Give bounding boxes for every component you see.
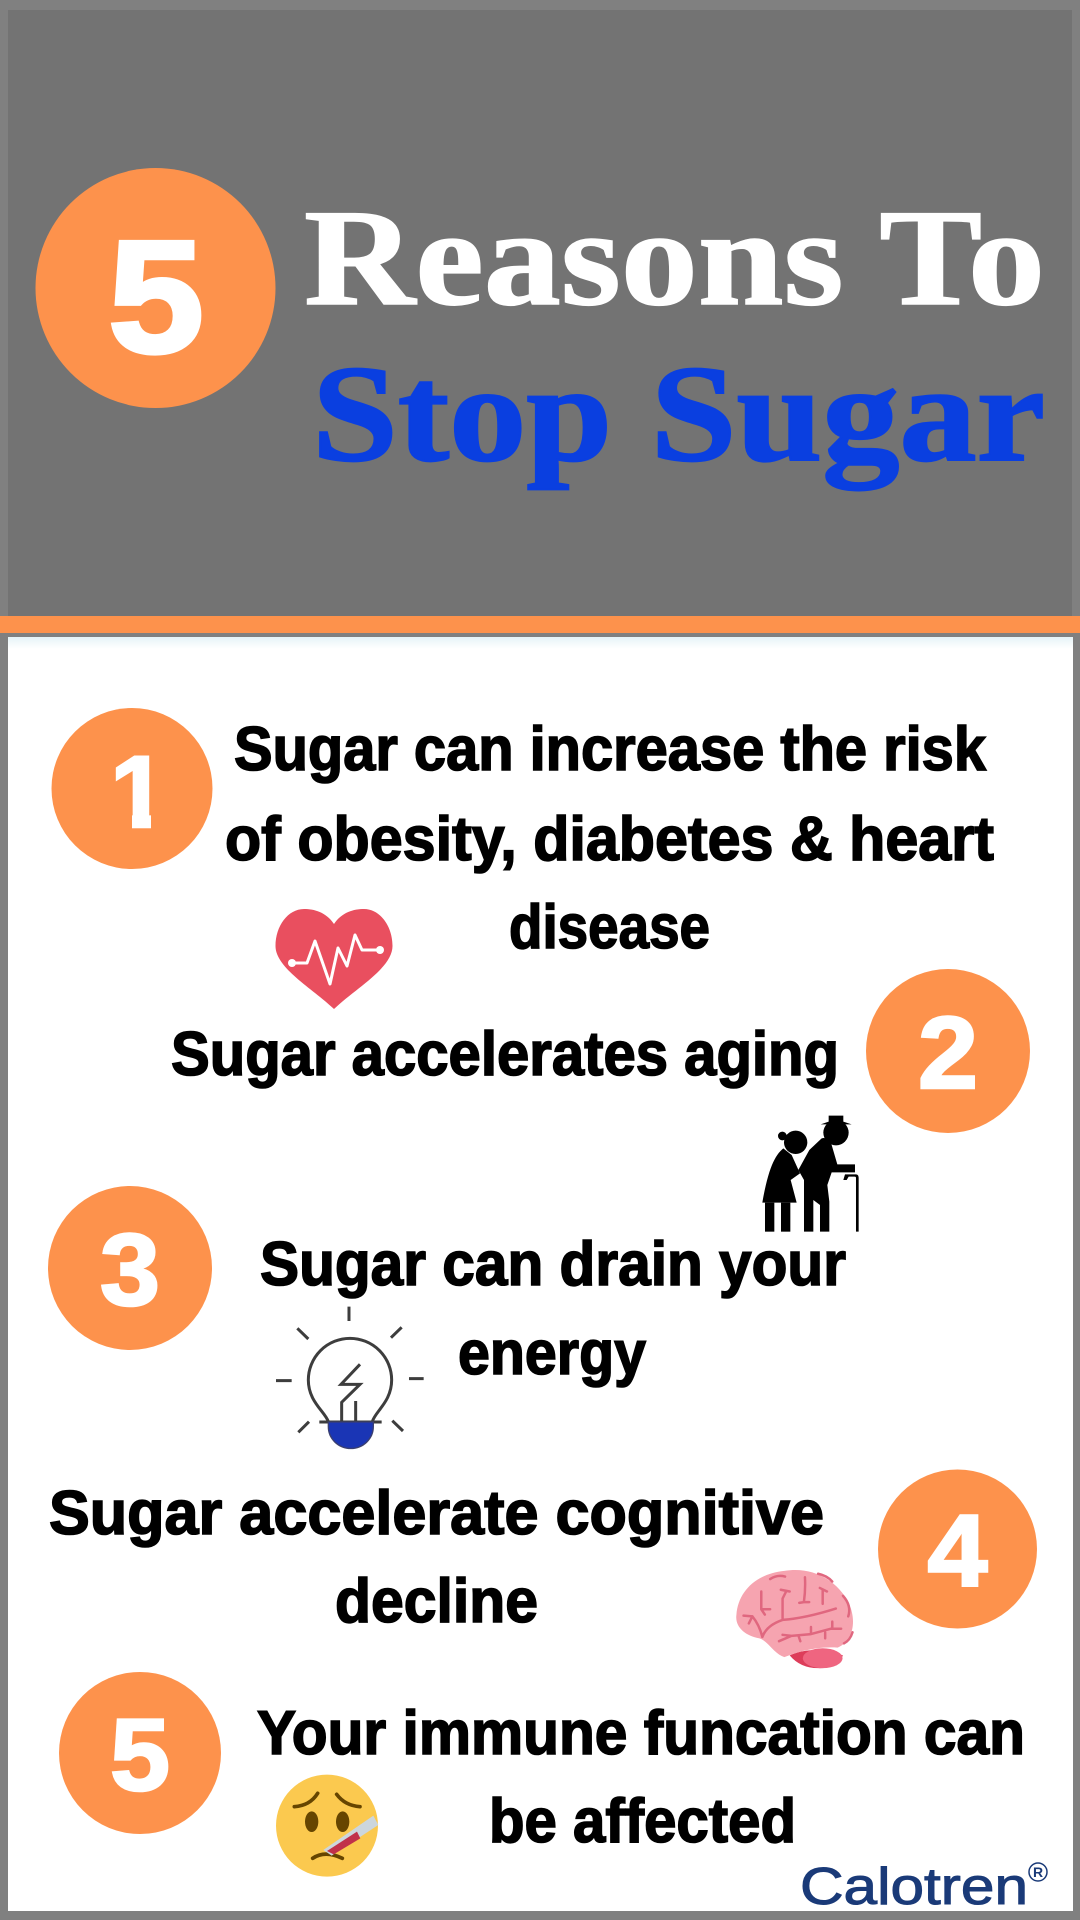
reason 3 text [260, 1230, 846, 1388]
reason 5 text: be affected [489, 1787, 796, 1856]
icon: elderly couple [762, 1116, 859, 1232]
reason 2 text: Sugar accelerates aging [171, 1020, 839, 1089]
header number badge [36, 168, 276, 408]
reason 3 [48, 1186, 846, 1448]
reason 1 text [225, 715, 994, 962]
badge 4: 4 [928, 1494, 988, 1608]
reason 4 text: Sugar accelerate cognitive [49, 1479, 824, 1548]
reason 1 text: disease [509, 893, 710, 962]
title line 1: Reasons To [304, 181, 1045, 334]
badge 1: 1 [110, 735, 167, 849]
reason 5 text: Your immune funcation can [257, 1699, 1025, 1768]
icon: brain [736, 1570, 853, 1668]
reason 3 text: Sugar can drain your [260, 1230, 846, 1299]
orange divider bar [0, 616, 1080, 633]
panel: reasons [8, 637, 1073, 1916]
reason 5 text [257, 1699, 1025, 1856]
reason 4 text [49, 1479, 824, 1636]
reason 1 text: Sugar can increase the risk [234, 715, 986, 784]
logo: Calotren: Calotren [800, 1858, 1028, 1916]
reason 1 text: of obesity, diabetes & heart [225, 805, 994, 874]
logo: Calotren: R [1033, 1864, 1043, 1880]
badge 4 [878, 1470, 1037, 1628]
reason 4 [49, 1470, 1037, 1668]
reason 1 [52, 708, 994, 1009]
badge 3: 3 [100, 1213, 160, 1327]
reason 4 text: decline [335, 1567, 538, 1636]
panel: header [8, 10, 1072, 616]
icon: light bulb [276, 1307, 424, 1448]
reason 3 text: energy [458, 1319, 646, 1388]
badge 2 [866, 969, 1030, 1133]
icon: heart with pulse [276, 909, 392, 1009]
reason 2 [171, 969, 1030, 1232]
title line 2: Stop Sugar [312, 337, 1045, 490]
badge 1 [52, 708, 212, 869]
icon: sick face with thermometer [276, 1775, 378, 1877]
reason 5 [59, 1672, 1025, 1877]
badge 5: 5 [110, 1698, 170, 1812]
badge 5 [59, 1672, 221, 1834]
badge 2: 2 [918, 996, 978, 1110]
badge 3 [48, 1186, 212, 1350]
header number badge: 5 [108, 207, 204, 386]
